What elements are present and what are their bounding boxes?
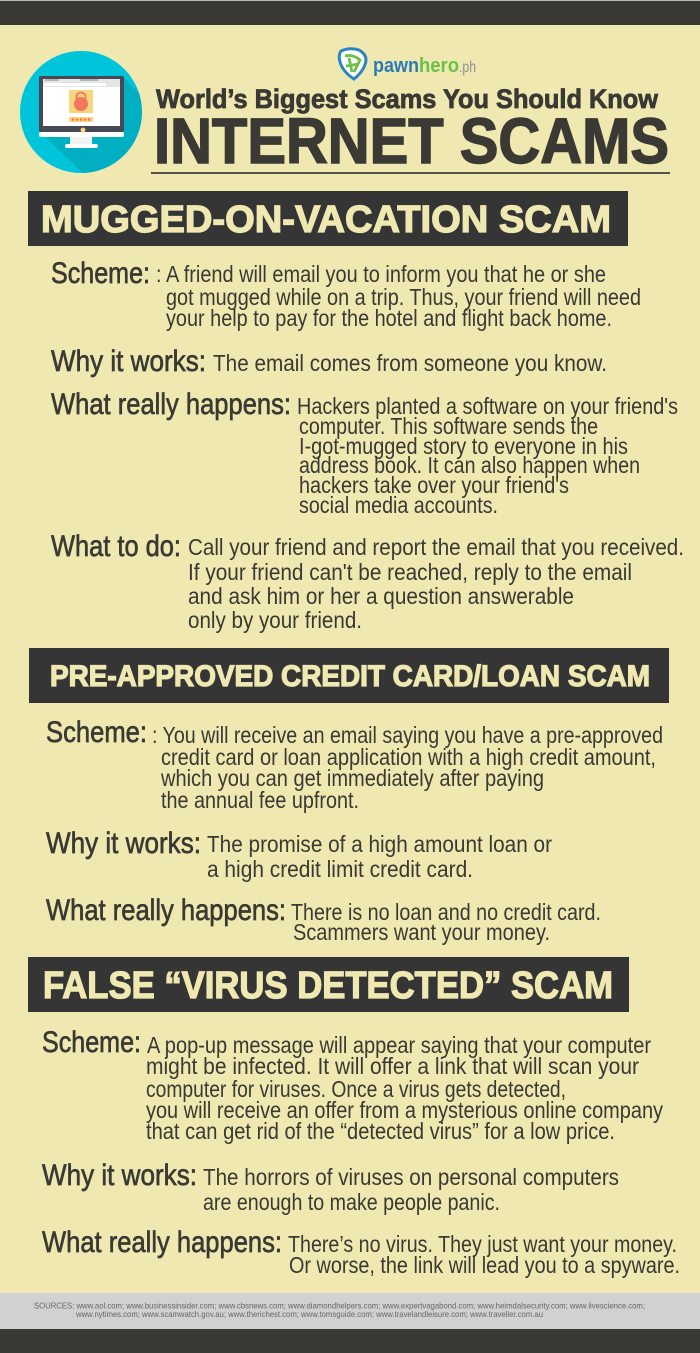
text block: what really happens [42,1226,680,1278]
text block: scheme [46,716,663,813]
text block: why it works: a high credit limit credit card. [207,856,473,882]
text block: scheme: Scheme: [51,257,150,290]
panel: pre-approved credit card scam [29,648,669,945]
text block: what really happens: What really happens: [51,388,291,421]
icon: pawnhero shield [339,49,366,79]
icon: computer with padlock [20,51,142,173]
text block: what really happens: There is no loan and no credit card. [291,899,601,925]
text block: scheme [42,1026,663,1144]
text block: why it works [42,1159,619,1215]
text block: what really happens: I-got-mugged story to everyone in his [299,433,628,459]
top bar [0,0,700,25]
text block: why it works: The promise of a high amount loan or [207,831,552,857]
text block: scheme: which you can get immediately after paying [160,765,544,791]
text block: what really happens: social media accounts. [299,492,498,518]
text block: what really happens: hackers take over your friend's [299,472,569,498]
sources footer [0,1293,700,1329]
text block: what to do: and ask him or her a question answerable [188,583,574,609]
logo: pawnhero.ph: pawn [373,55,419,77]
panel: mugged-on-vacation scam [28,191,684,633]
text block: why it works: The horrors of viruses on personal computers [203,1164,619,1190]
text block: scheme: that can get rid of the “detected virus” for a low price. [146,1118,615,1144]
text block: why it works [51,345,607,378]
sources footer: www.nytimes.com; www.scamwatch.gov.au; www.therichest.com; www.tomsguide.com; www.travelandleisure.com; www.traveller.com.au [75,1309,543,1319]
text block: why it works: The email comes from someone you know. [213,350,607,376]
text block: what really happens: What really happens: [42,1226,282,1259]
text block: what really happens: Scammers want your money. [293,919,550,945]
text block: what really happens [51,388,678,518]
text block: why it works: Why it works: [46,827,201,860]
subtitle: World’s Biggest Scams You Should Know [156,84,659,114]
logo: pawnhero.ph [339,49,476,79]
bottom bar [0,1329,700,1353]
text block: why it works: are enough to make people panic. [203,1189,500,1215]
text block: what to do: If your friend can't be reached, reply to the email [188,559,632,585]
heading: false virus detected: FALSE “VIRUS DETECTED” SCAM [43,965,613,1007]
heading: mugged-on-vacation: MUGGED-ON-VACATION SCAM [41,199,611,241]
text block: scheme: might be infected. It will offer a link that will scan your [146,1053,639,1079]
text block: what to do: only by your friend. [188,607,362,633]
text block: why it works: Why it works: [42,1159,197,1192]
sources footer: SOURCES: www.aol.com; www.businessinsider.com; www.cbsnews.com; www.diamondhelpers.com; www.expertvagabond.com; www.heimdalsecurity.com; www.livescience.com; [34,1300,645,1310]
text block: scheme: the annual fee upfront. [161,787,359,813]
text block: why it works [46,827,552,882]
text block: what really happens: computer. This software sends the [299,413,598,439]
text block: scheme: your help to pay for the hotel and flight back home. [166,305,612,331]
text block: what really happens [46,894,601,945]
text block: what really happens: address book. It can also happen when [299,452,640,478]
text block: what to do: What to do: [51,530,181,563]
text block: scheme: computer for viruses. Once a virus gets detected, [146,1076,566,1102]
text block: why it works: Why it works: [51,345,206,378]
text block: scheme [51,257,641,331]
text block: scheme: Scheme: [46,716,147,749]
text block: what really happens: What really happens: [46,894,286,927]
heading: pre-approved: PRE-APPROVED CREDIT CARD/LOAN SCAM [50,660,650,693]
text block: what to do [51,530,684,633]
logo: pawnhero.ph: hero [419,55,459,77]
text block: scheme: : A friend will email you to inform you that he or she [156,261,606,287]
text block: scheme: Scheme: [42,1026,141,1059]
heading: pre-approved [29,648,669,703]
panel: false virus detected scam [28,957,680,1278]
logo: pawnhero.ph: .ph [459,59,476,76]
